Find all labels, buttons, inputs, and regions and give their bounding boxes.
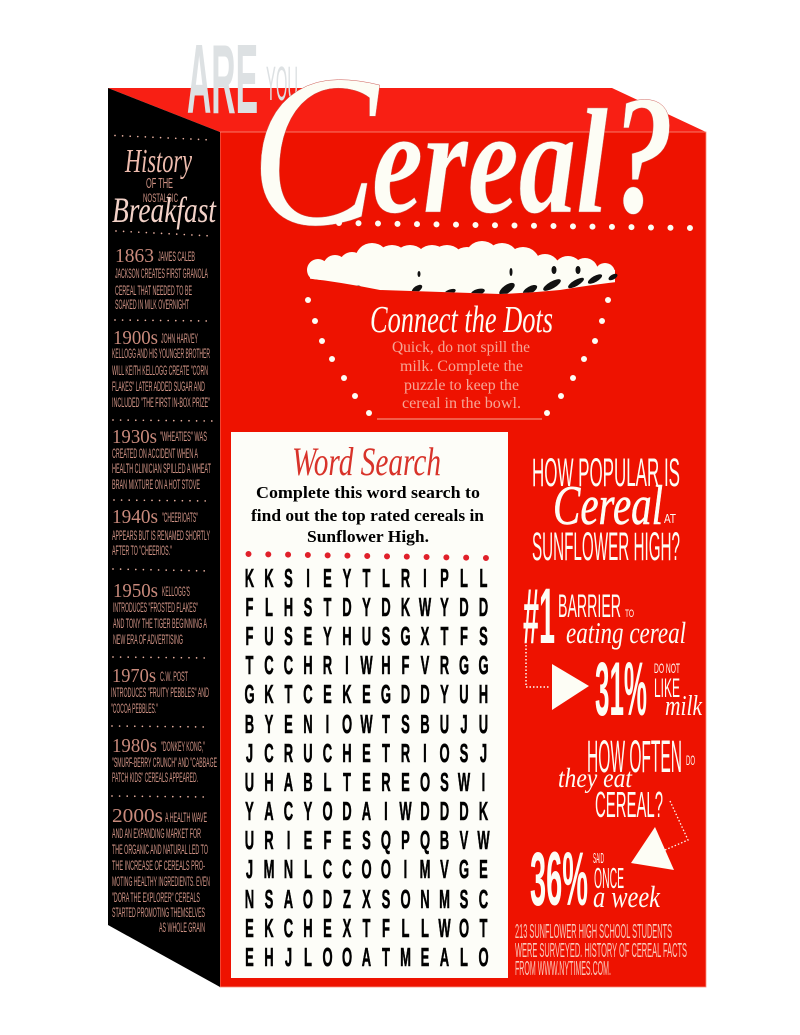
text: MOTING HEALTHY INGREDIENTS. EVEN xyxy=(112,874,210,889)
heading: how often do they eat cereal: they eat xyxy=(558,763,633,793)
survey source note: FROM WWW.NYTIMES.COM. xyxy=(515,958,611,980)
connect the dots instructions: milk. Complete the xyxy=(400,358,523,375)
panel: history side of box: A HEALTH WAVE xyxy=(165,810,207,825)
text: AND TONY THE TIGER BEGINNING A xyxy=(113,616,207,631)
panel: history side of box xyxy=(108,88,220,987)
word search instructions: find out the top rated cereals in xyxy=(251,506,485,525)
1980s entry xyxy=(112,735,217,785)
2000s entry: 2000s xyxy=(112,805,163,827)
word search letter grid: YACYODAIWDDDK xyxy=(245,797,488,826)
title: cereal?: C xyxy=(250,31,380,272)
1970s entry: 1970s xyxy=(112,665,156,687)
text: BRAN MIXTURE ON A HOT STOVE xyxy=(112,477,200,492)
heading: how often do they eat cereal xyxy=(558,731,695,825)
word search letter grid: EKCHEXTFLLWOT xyxy=(245,914,488,943)
icon: bowl of milk and cereal xyxy=(305,241,619,419)
word search letter grid: NSAODZXSONMSC xyxy=(245,885,488,914)
text: THE INCREASE OF CEREALS PRO- xyxy=(112,858,205,873)
1950s entry xyxy=(113,580,207,647)
stat: number one barrier: #1 xyxy=(523,571,555,660)
1863 entry: JAMES CALEB xyxy=(158,249,195,264)
cereal box front panel xyxy=(220,132,706,987)
text: HEALTH CLINICIAN SPILLED A WHEAT xyxy=(112,461,211,476)
panel: word search xyxy=(231,432,508,978)
word search letter grid: JCRUCHETRIOSJ xyxy=(246,739,487,768)
text: FLAKES" LATER ADDED SUGAR AND xyxy=(112,379,205,394)
stat: number one barrier: BARRIER xyxy=(558,588,621,624)
stat: 36 percent said once a week: a week xyxy=(593,879,661,914)
1970s entry: "COCOA PEBBLES." xyxy=(111,701,158,716)
history heading: OF THE xyxy=(146,175,173,192)
stat: 31 percent do not like milk: LIKE xyxy=(654,673,680,703)
icon: tilted triangle xyxy=(631,827,674,870)
text: STARTED PROMOTING THEMSELVES xyxy=(112,905,205,920)
history heading: History xyxy=(124,143,193,180)
dotted connector to first arrow xyxy=(526,645,550,687)
text: INTRODUCES "FROSTED FLAKES" xyxy=(113,600,198,615)
word search letter grid: UHABLTEREOSWI xyxy=(245,768,485,797)
text: APPEARS BUT IS RENAMED SHORTLY xyxy=(112,528,210,543)
connect the dots instructions: Quick, do not spill the xyxy=(392,339,530,356)
1970s entry xyxy=(111,665,209,716)
panel: history side of box: AS WHOLE GRAIN xyxy=(159,920,205,935)
text: CREATED ON ACCIDENT WHEN A xyxy=(112,446,198,461)
1900s entry xyxy=(112,327,210,410)
panel: history side of box: "CHEERIOATS" xyxy=(162,510,198,525)
1940s entry: 1940s xyxy=(112,506,158,528)
word search letter grid xyxy=(244,564,490,972)
stat: 31 percent do not like milk: milk xyxy=(665,690,703,722)
stat: number one barrier xyxy=(523,571,686,660)
text: "DORA THE EXPLORER" CEREALS xyxy=(112,890,200,905)
heading: how popular is cereal xyxy=(532,451,680,569)
1863 entry xyxy=(115,245,208,312)
panel: history side of box: "DONKEY KONG," xyxy=(161,739,205,754)
word search letter grid: BYENIOWTSBUJU xyxy=(245,710,488,739)
connect the dots instructions xyxy=(392,339,530,412)
history heading: NOSTALGIC xyxy=(143,191,178,205)
1900s entry: JOHN HARVEY xyxy=(161,331,198,346)
title: cereal?: ereal xyxy=(372,79,608,245)
stat: 31 percent do not like milk: DO NOT xyxy=(654,660,680,676)
title: cereal? xyxy=(250,31,674,272)
text: YOU xyxy=(266,58,298,111)
1930s entry xyxy=(112,426,211,492)
history heading: Breakfast xyxy=(112,190,217,230)
panel: history side of box: "WHEATIES" WAS xyxy=(160,429,207,444)
1970s entry: C.W. POST xyxy=(160,669,188,684)
word search letter grid: TCCHRIWHFVRGG xyxy=(246,651,489,680)
word search letter grid: FUSEYHUSGXTFS xyxy=(246,622,488,651)
word search heading: Word Search xyxy=(292,439,441,484)
title: are you xyxy=(187,24,298,134)
word search letter grid: JMNLCCOOIMVGE xyxy=(246,855,488,884)
text: DO xyxy=(686,752,695,768)
connect the dots heading: Connect the Dots xyxy=(370,299,553,341)
cereal box top flap xyxy=(108,88,706,132)
connect the dots instructions: puzzle to keep the xyxy=(404,377,519,394)
heading: how often do they eat cereal: CEREAL? xyxy=(595,784,663,825)
1940s entry: AFTER TO "CHEERIOS." xyxy=(112,543,172,558)
text: WILL KEITH KELLOGG CREATE "CORN xyxy=(112,363,208,378)
dotted connector to second arrow xyxy=(665,801,688,850)
icon: right-pointing triangle xyxy=(552,664,589,710)
2000s entry xyxy=(112,805,210,935)
text: PATCH KIDS" CEREALS APPEARED. xyxy=(112,770,198,785)
text: AND AN EXPANDING MARKET FOR xyxy=(112,826,201,841)
text: INCLUDED "THE FIRST IN-BOX PRIZE" xyxy=(112,395,210,410)
word search letter grid: KKSIEYTLRIPLL xyxy=(245,564,487,593)
word search instructions: Complete this word search to xyxy=(256,483,480,502)
stat: 31 percent do not like milk: 31% xyxy=(595,647,647,732)
stat: 36 percent said once a week: 36% xyxy=(530,837,588,922)
history heading xyxy=(112,143,217,230)
stat: 36 percent said once a week: SAID xyxy=(593,850,604,867)
word search letter grid: GKTCEKEGDDYUH xyxy=(244,680,488,709)
stat: number one barrier: eating cereal xyxy=(566,615,686,650)
1940s entry xyxy=(112,506,210,558)
text: KELLOGG AND HIS YOUNGER BROTHER xyxy=(112,346,210,361)
text: THE ORGANIC AND NATURAL LED TO xyxy=(112,842,208,857)
heading: how popular is cereal: AT xyxy=(664,511,676,526)
panel: history side of box: CEREAL THAT NEEDED TO BE xyxy=(115,283,192,298)
1950s entry: NEW ERA OF ADVERTISING xyxy=(113,632,183,647)
1950s entry: 1950s xyxy=(113,580,158,602)
title dotted line xyxy=(339,223,690,228)
panel: history side of box: SOAKED IN MILK OVERNIGHT xyxy=(115,297,189,312)
word search letter grid: FLHSTDYDKWYDD xyxy=(246,593,488,622)
word search letter grid: URIEFESQPQBVW xyxy=(245,826,490,855)
1863 entry: 1863 xyxy=(115,245,154,267)
word search letter grid: EHJLOOATMEALO xyxy=(245,943,489,972)
connect the dots instructions: cereal in the bowl. xyxy=(402,395,521,412)
stat: 36 percent said once a week: ONCE xyxy=(594,863,624,895)
word search instructions: Sunflower High. xyxy=(307,527,429,546)
stat: number one barrier: TO xyxy=(625,608,634,620)
text: JACKSON CREATES FIRST GRANOLA xyxy=(115,266,208,281)
1980s entry: 1980s xyxy=(112,735,157,757)
survey source note xyxy=(515,921,687,980)
1900s entry: 1900s xyxy=(113,327,158,349)
text: "SMURF-BERRY CRUNCH" AND "CABBAGE xyxy=(112,755,217,770)
word search instructions xyxy=(251,483,485,546)
1930s entry: 1930s xyxy=(112,426,157,448)
title: cereal?: ? xyxy=(612,61,674,249)
title: are you: ARE xyxy=(187,24,258,134)
heading: how popular is cereal: Cereal xyxy=(553,475,663,537)
1950s entry: KELLOGG'S xyxy=(162,584,190,599)
text: INTRODUCES "FRUITY PEBBLES" AND xyxy=(111,685,209,700)
